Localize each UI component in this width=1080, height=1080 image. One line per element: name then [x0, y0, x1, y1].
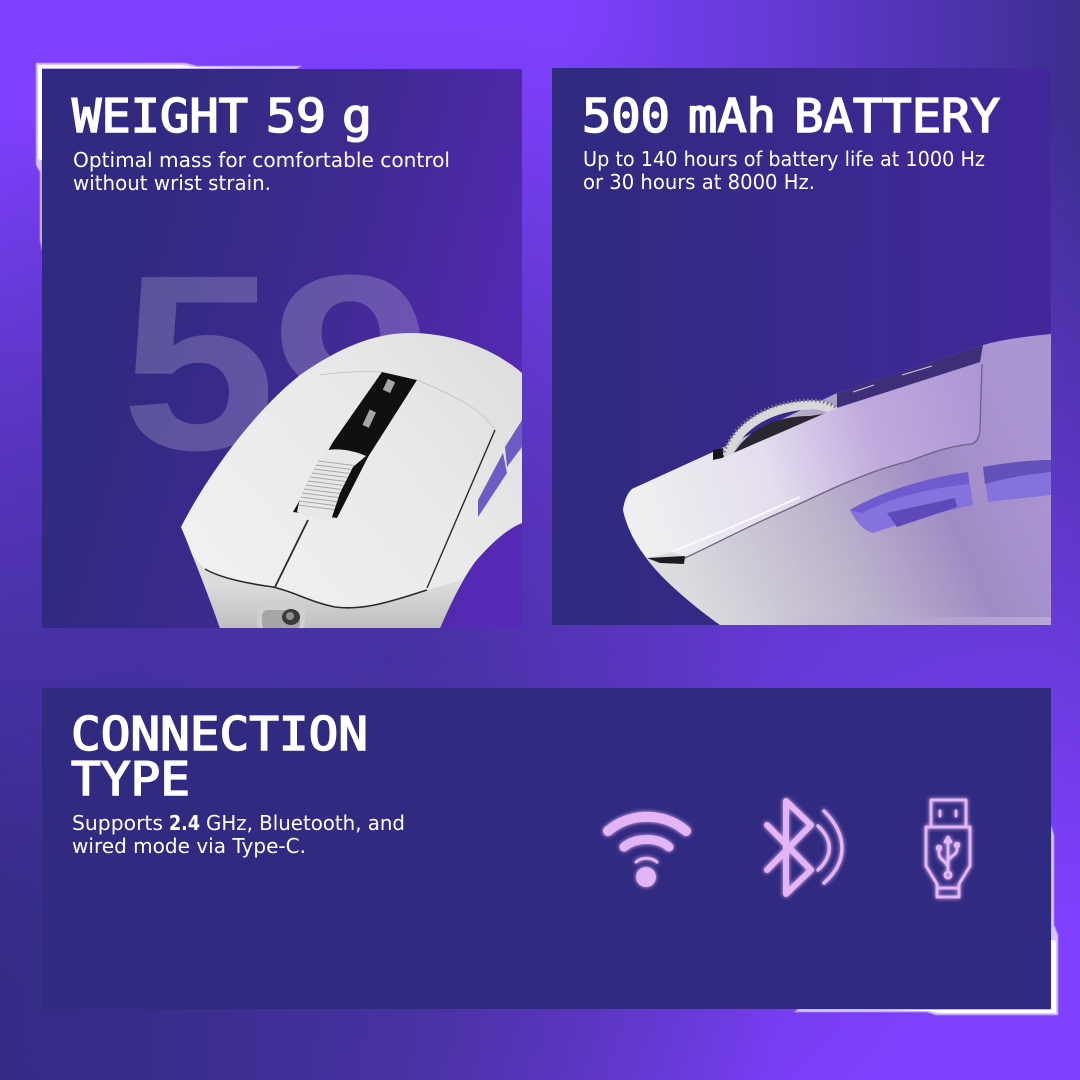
watermark number 59: 5 [121, 223, 276, 502]
weight description [73, 148, 450, 195]
panel: weight [42, 69, 522, 631]
panel: battery [552, 68, 1051, 625]
connection description: GHz, Bluetooth, and [206, 811, 405, 835]
mouse: side view [623, 334, 1051, 625]
icon: bluetooth [767, 801, 842, 894]
weight description: Optimal mass for comfortable control [73, 148, 450, 172]
mouse scroll wheel [297, 449, 366, 520]
heading: connection type: TYPE [71, 752, 190, 806]
connection description: Supports [72, 811, 163, 835]
mouse: top view [181, 333, 522, 631]
weight description: without wrist strain. [73, 171, 271, 195]
mouse seam line [685, 364, 982, 558]
heading: weight: g [342, 89, 372, 143]
heading: weight: WEIGHT [72, 89, 248, 143]
mouse front skirt [188, 545, 462, 628]
mouse scroll wheel [713, 400, 837, 462]
connection description: wired mode via Type-C. [72, 834, 306, 858]
mouse panel seams [205, 372, 495, 608]
watermark number 59 [130, 274, 420, 452]
heading: weight [72, 89, 372, 143]
panel: connection type [42, 688, 1051, 1009]
mouse top cover [623, 362, 982, 558]
mouse display strip [837, 345, 983, 408]
heading: battery [582, 89, 1000, 143]
icon: wifi [608, 817, 686, 887]
heading: battery: 500 [582, 89, 670, 143]
mouse side buttons [850, 472, 973, 533]
battery description [583, 147, 985, 194]
mouse side buttons [505, 420, 522, 467]
icon: usb [926, 800, 970, 897]
heading: battery: BATTERY [794, 89, 1000, 143]
mouse OLED display [293, 372, 417, 518]
heading: connection type: CONNECTION [71, 707, 368, 761]
glowing frame corner: bottom right [794, 825, 1058, 1015]
connection description: 2.4 [169, 811, 200, 835]
battery description: or 30 hours at 8000 Hz. [583, 170, 815, 194]
heading: weight: 59 [266, 89, 326, 143]
battery description: Up to 140 hours of battery life at 1000 Hz [583, 147, 985, 171]
connection description [72, 811, 405, 858]
heading: battery: mAh [688, 89, 776, 143]
mouse USB port [257, 616, 305, 628]
glowing frame corner: top left [36, 63, 302, 252]
watermark number 59: 9 [271, 223, 433, 502]
heading: connection type [71, 707, 368, 806]
